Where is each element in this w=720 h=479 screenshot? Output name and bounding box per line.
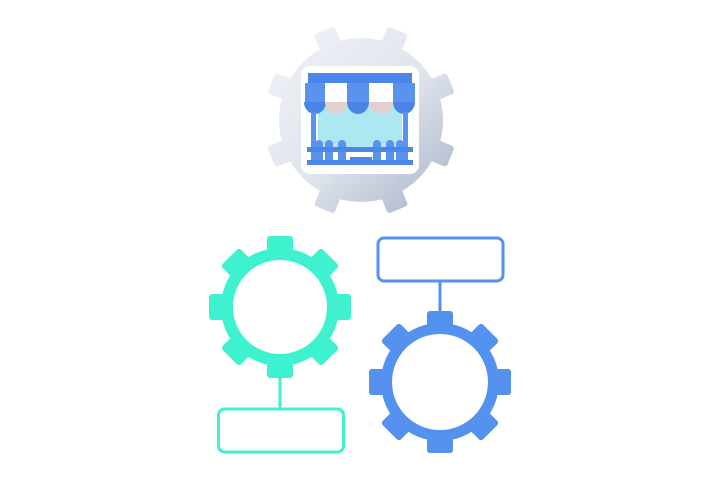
icon: green gear with box below: [209, 236, 351, 452]
blue box: [378, 238, 503, 281]
icon: blue gear with box above: [369, 238, 511, 453]
connector line: [278, 377, 282, 409]
green gear: [209, 236, 351, 378]
icon: gray gear with storefront: [268, 27, 454, 213]
connector line: [438, 282, 442, 313]
gray gear: [268, 27, 454, 213]
storefront: [301, 66, 419, 174]
blue gear: [369, 311, 511, 453]
green box: [218, 409, 344, 452]
